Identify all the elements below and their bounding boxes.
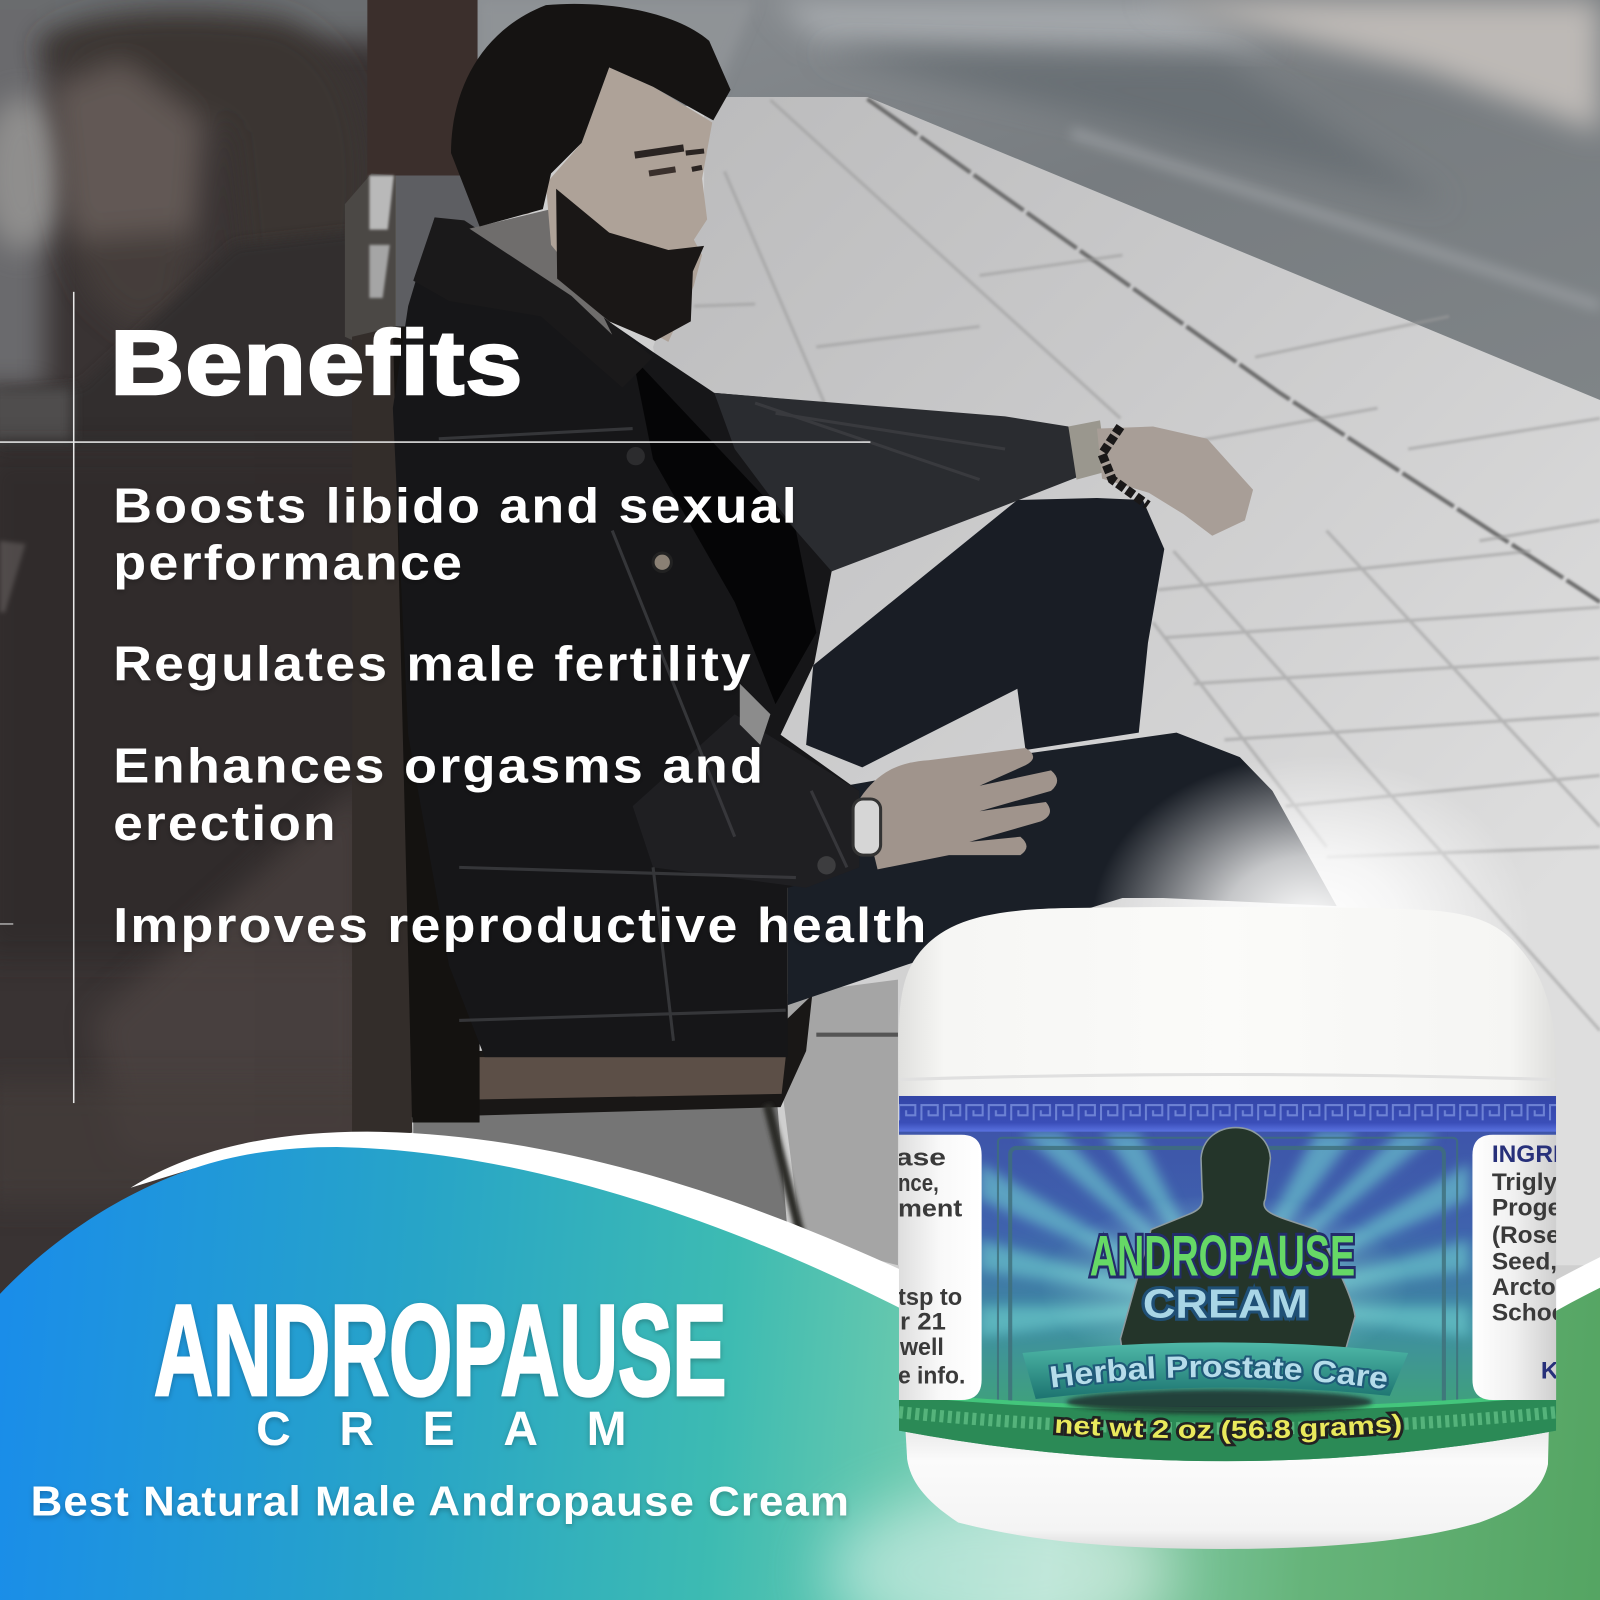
thigh [806, 498, 1164, 767]
lower leg [788, 733, 1337, 1005]
sun rays [980, 1133, 1469, 1337]
left side panel [896, 1135, 982, 1400]
gradient wave panel [0, 1147, 1600, 1600]
ribbon text: Herbal Prostate Care [1048, 1354, 1389, 1390]
benefit 1 [113, 479, 799, 591]
jar lid [898, 907, 1556, 1098]
product name block [31, 1279, 850, 1524]
ray core glow [1060, 1202, 1390, 1346]
benefit 1: performance [113, 537, 464, 591]
top blue band [899, 1096, 1556, 1132]
glow behind jar [1092, 755, 1531, 1092]
right side panel [1472, 1134, 1556, 1400]
hair [451, 4, 731, 227]
collar [413, 217, 653, 388]
net weight text: net wt 2 oz (56.8 grams) [1052, 1411, 1404, 1446]
vertical line [73, 292, 74, 1103]
ribbon shadow [1066, 1390, 1372, 1414]
wall pillar and edge [345, 0, 480, 1143]
benefit 3: Enhances orgasms and [113, 740, 765, 794]
benefit 4: Improves reproductive health [113, 899, 929, 953]
pavement [653, 97, 1600, 1265]
left side panel: ment [898, 1195, 962, 1222]
tagline: Best Natural Male Andropause Cream [31, 1478, 850, 1524]
upper hand with bracelet [1068, 420, 1253, 536]
product jar [898, 907, 1556, 1549]
silhouette [1120, 1128, 1355, 1352]
heading: Benefits: Benefits [110, 313, 523, 414]
benefit 1: Boosts libido and sexual [113, 479, 799, 533]
left side panel: well [899, 1334, 944, 1361]
jar label [899, 1096, 1556, 1462]
ANDROPAUSE title: ANDROPAUSE [154, 1279, 727, 1423]
benefit 2: Regulates male fertility [113, 638, 753, 692]
ground stones under man [408, 949, 898, 1265]
benefit 3 [113, 740, 765, 851]
ear and face [503, 67, 712, 342]
right side panel: Seed, [1492, 1248, 1557, 1275]
dark inner panel [633, 357, 816, 704]
reflected shoulder [79, 236, 344, 394]
ribbon [1022, 1342, 1408, 1399]
bottom green band [899, 1398, 1556, 1462]
label CREAM: CREAM [1143, 1280, 1308, 1326]
glow on wave bottom [827, 1490, 1173, 1600]
sleeve [714, 393, 1082, 571]
right side panel: K [1541, 1358, 1559, 1385]
left wall reflection [0, 0, 370, 1294]
neck and inner collar [469, 209, 612, 335]
road [469, 0, 1600, 403]
lower hand with watch [853, 748, 1057, 869]
lid seam [900, 1074, 1555, 1080]
left side panel: tsp to [898, 1284, 962, 1311]
left side panel: nce, [898, 1170, 939, 1197]
man sitting by the wall [393, 4, 1337, 1057]
jacket [393, 217, 1082, 1057]
benefit 3: erection [113, 797, 338, 851]
small tick [0, 923, 13, 924]
white wave band [131, 1132, 1600, 1429]
horizontal line [0, 441, 870, 443]
jar base [905, 1423, 1549, 1549]
CREAM subtitle: CREAM [256, 1403, 627, 1456]
left side panel: r 21 [900, 1309, 946, 1336]
reflected head [39, 11, 368, 332]
ornamental frame [998, 1138, 1457, 1418]
label title ANDROPAUSE: ANDROPAUSE [1090, 1225, 1355, 1289]
left side panel: e info. [898, 1363, 965, 1390]
benefits list [113, 479, 929, 953]
lower sleeve [633, 714, 859, 888]
left side panel: ase [896, 1144, 946, 1171]
